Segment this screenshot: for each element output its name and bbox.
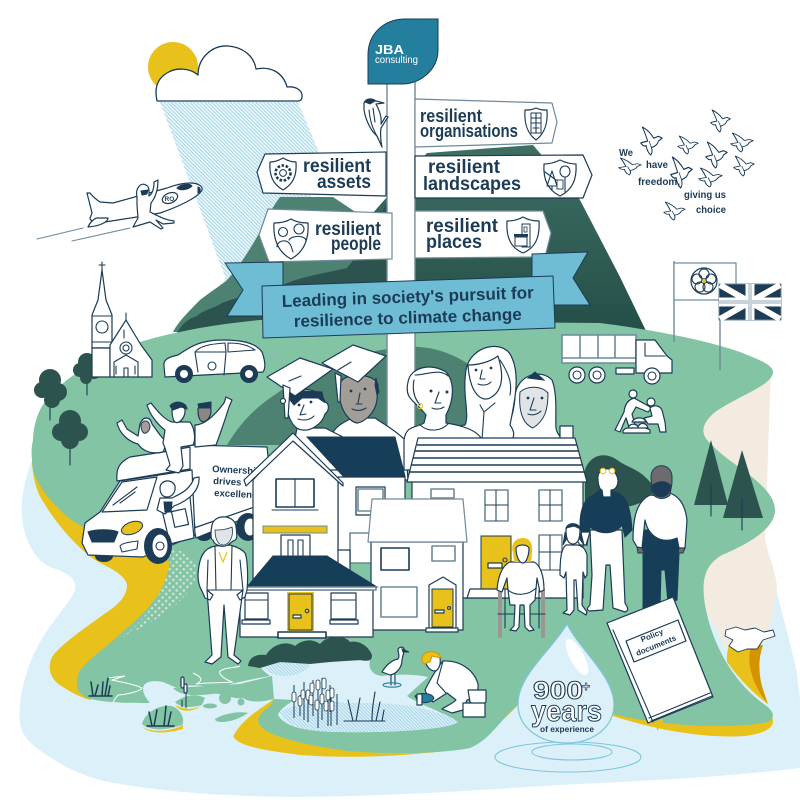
plane with rider: [37, 180, 202, 241]
icon: building shield: [525, 108, 547, 140]
sign: resilient places: places: [426, 232, 482, 253]
small middle house: [368, 499, 467, 632]
rain shower: [160, 102, 322, 282]
union flag: [719, 284, 781, 320]
sign: resilient organisations: resilient: [420, 106, 482, 126]
water drop: 900+ years of experience: +: [582, 678, 590, 694]
water drop: 900+ years of experience: of experience: [540, 725, 595, 734]
graduate right: [322, 345, 408, 480]
book: policy documents: [607, 597, 713, 731]
reeds: [292, 678, 337, 728]
people on the van roof: [117, 397, 232, 473]
sign: resilient people: people: [331, 234, 381, 255]
van text: drives: [213, 476, 242, 488]
beach: yellow sand banks: [32, 462, 773, 757]
sign: resilient organisations: organisations: [420, 121, 518, 141]
water drop: 900+ years of experience: 900: [533, 677, 583, 705]
water drop: 900+ years of experience: [518, 624, 614, 743]
man with beard: [633, 466, 687, 610]
right house: [407, 426, 587, 598]
banner: Leading in society's pursuit for: [281, 283, 534, 311]
bush behind men: [585, 455, 653, 508]
car: [164, 340, 265, 383]
mountain: [173, 145, 648, 340]
bird caption text: We: [619, 148, 633, 159]
rider: [133, 180, 174, 229]
banner tails: [225, 252, 590, 316]
pond islands: [142, 676, 274, 732]
wing: [307, 437, 405, 580]
icon: houses shield: [507, 217, 539, 253]
banner: resilience to climate change: [294, 305, 522, 331]
bird caption text: choice: [696, 205, 726, 216]
halftone dots: [123, 548, 197, 637]
grass tufts: [89, 677, 385, 726]
bird caption text: [619, 148, 726, 216]
sign: resilient assets: assets: [317, 172, 371, 193]
team women: [404, 346, 562, 470]
flags: [674, 261, 781, 370]
icon: trees shield: [544, 160, 576, 196]
front house: [240, 556, 377, 638]
banner: [225, 252, 590, 338]
plane with rider: RO: [164, 196, 174, 203]
trees: round: [34, 353, 101, 465]
woman with headscarf: [505, 372, 562, 440]
pond water: [143, 660, 458, 740]
sign: resilient organisations: [415, 99, 557, 147]
beach: sand: [680, 374, 777, 655]
hatched pond areas: [260, 662, 458, 732]
post: [387, 80, 415, 450]
sign: resilient people: [259, 209, 392, 262]
bird caption text: have: [646, 160, 668, 171]
van cab: [95, 550, 113, 562]
sign: resilient landscapes: landscapes: [423, 174, 521, 195]
logo: JBA consulting leaf: JBA: [375, 42, 405, 57]
water ripples: [495, 742, 641, 772]
heron: [382, 647, 409, 687]
person in wheelchair: [497, 538, 545, 636]
main block: [253, 437, 338, 590]
rocks and coastal defence: [725, 627, 775, 704]
van text: Ownership: [212, 464, 262, 478]
bird caption text: freedom,: [638, 177, 680, 188]
truck: [562, 335, 672, 384]
bird caption text: giving us: [684, 190, 726, 201]
stream lines: [107, 666, 240, 702]
centre house: [244, 433, 405, 590]
water: [19, 460, 800, 797]
sun: [148, 42, 198, 92]
van text: excellence: [214, 488, 263, 502]
graduate left: [267, 358, 345, 470]
workers with sandbags: [615, 390, 666, 433]
scientist sampling water: [415, 652, 486, 717]
main green land: [32, 320, 775, 753]
water drop: 900+ years of experience: years: [531, 695, 602, 728]
icon: people shield: [274, 219, 308, 259]
sign: resilient people: resilient: [315, 219, 382, 240]
older man in navy jumper: [577, 468, 632, 612]
woman with long hair: [450, 346, 516, 440]
sign: resilient places: resilient: [426, 216, 499, 237]
woodpecker: [364, 99, 388, 147]
van text: [212, 464, 263, 502]
icon: gear shield: [270, 158, 296, 190]
driver waving: [157, 477, 199, 514]
birds flock: [619, 110, 754, 220]
book: policy documents: documents: [635, 633, 678, 658]
sign: resilient landscapes: [415, 155, 592, 198]
sign: resilient places: [415, 211, 551, 258]
van box: [188, 445, 268, 530]
woman standing with necklace: [198, 517, 248, 664]
icon: white rose: [691, 268, 717, 294]
sign: resilient assets: resilient: [303, 156, 372, 177]
sign: resilient assets: [257, 152, 386, 196]
book: policy documents: Policy: [639, 627, 665, 644]
cloud: [156, 46, 302, 101]
sign: resilient landscapes: resilient: [428, 157, 501, 178]
logo: JBA consulting leaf: [368, 19, 438, 84]
woman with earring: [404, 367, 482, 470]
van: [82, 445, 268, 564]
graduates: [267, 345, 408, 480]
logo: JBA consulting leaf: consulting: [375, 55, 418, 66]
hill behind the team: [227, 347, 480, 445]
girl: [560, 524, 587, 615]
church: [92, 262, 152, 377]
trees: conifers: [694, 440, 763, 530]
bush by pond: [248, 637, 372, 668]
